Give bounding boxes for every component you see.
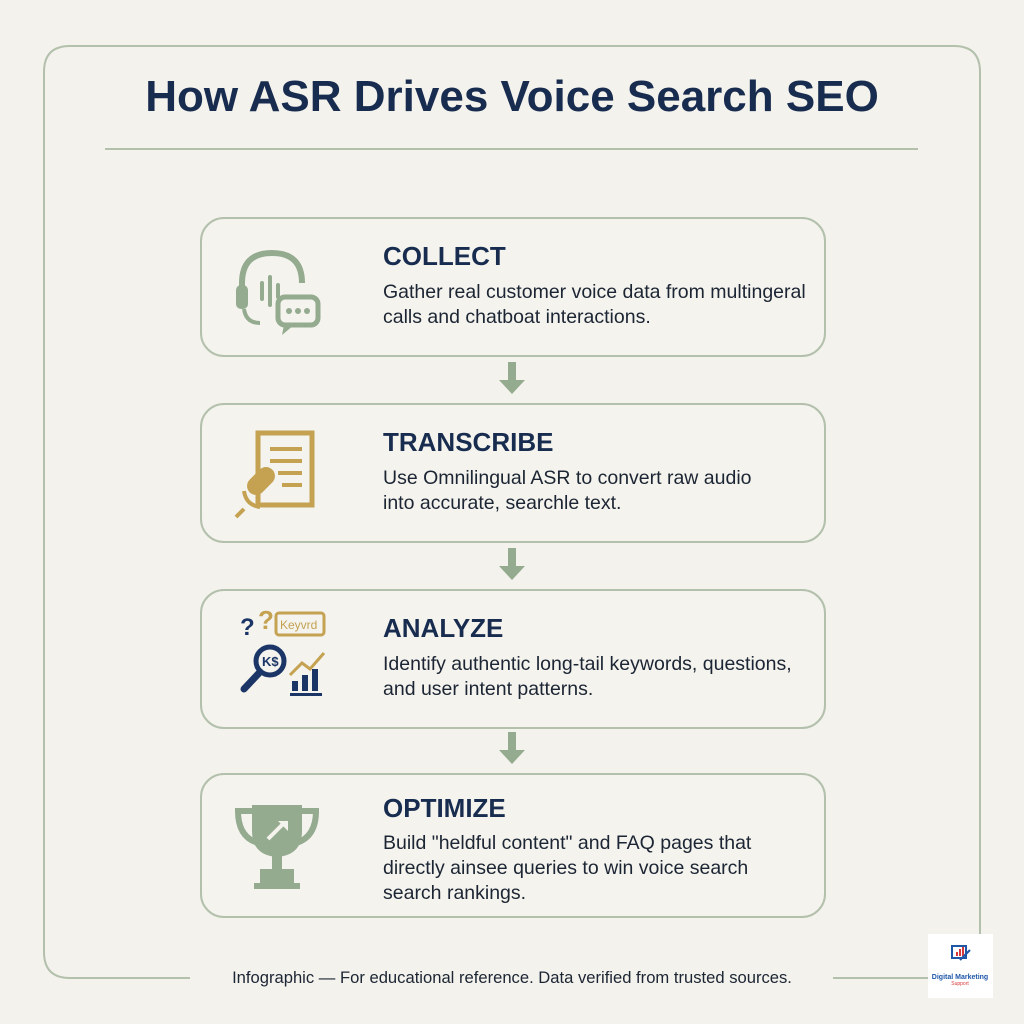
arrow [499,732,525,764]
heading: TRANSCRIBE [383,427,553,457]
arrow [499,362,525,394]
icon: magnifier keyword chart: ? [240,614,255,641]
text: Identify authentic long-tail keywords, questions, and user intent patterns. [383,653,792,700]
icon: magnifier keyword chart: Keyvrd [280,618,317,632]
card: analyze [200,589,826,729]
icon: trophy [235,805,319,889]
title: How ASR Drives Voice Search SEO [145,72,879,121]
logo [928,934,993,998]
text: Gather real customer voice data from multingeral calls and chatboat interactions. [383,281,806,328]
card: transcribe [200,403,826,543]
text: Use Omnilingual ASR to convert raw audio into accurate, searchle text. [383,467,752,514]
icon: magnifier keyword chart [240,605,326,696]
icon: magnifier keyword chart: K$ [262,654,279,669]
icon: headset [236,250,320,335]
text: Build "heldful content" and FAQ pages that directly ainsee queries to win voice search search rankings. [383,832,751,904]
heading: COLLECT [383,241,506,271]
logo: Digital Marketing [932,974,988,981]
footer: Infographic — For educational reference. Data verified from trusted sources. [232,968,792,987]
icon: magnifier keyword chart: ? [258,605,274,635]
heading: OPTIMIZE [383,793,506,823]
heading: ANALYZE [383,613,503,643]
icon: document mic [234,430,314,518]
logo: Support [951,981,969,987]
arrow [499,548,525,580]
card: optimize [200,773,826,918]
card: collect [200,217,826,357]
